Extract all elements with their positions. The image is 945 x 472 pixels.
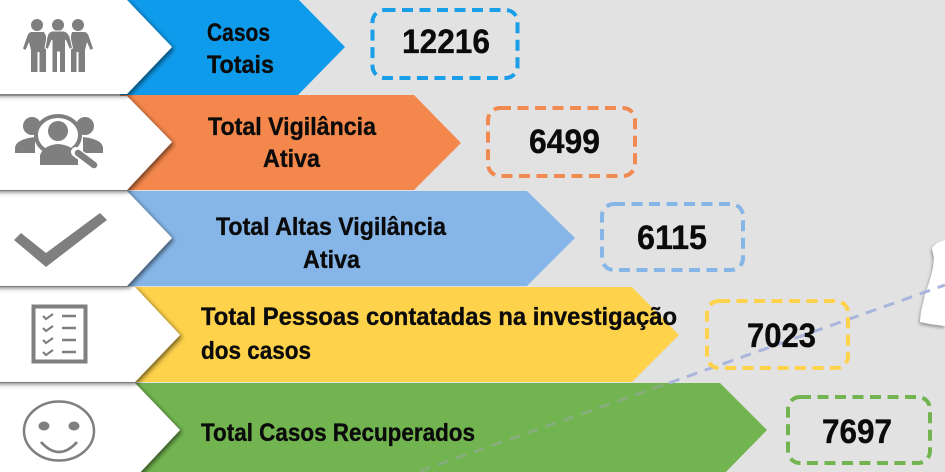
white tab: row 5 (0, 383, 180, 472)
value box: 6115: 6115 (637, 219, 707, 257)
value box: 12216: 12216 (402, 23, 490, 61)
icon: three people (23, 19, 93, 72)
white tab: row 2 (0, 96, 172, 190)
arrow: total vigilancia ativa (120, 95, 461, 190)
icon: checklist (34, 306, 86, 362)
arrow: total casos recuperados (125, 383, 767, 472)
label: total pessoas contatadas: Total Pessoas contatadas na investigação (201, 303, 677, 331)
arrow: total pessoas contatadas (125, 287, 679, 382)
arrow: casos totais (120, 0, 345, 95)
dashed connector line (420, 285, 945, 471)
map fragment (920, 240, 945, 326)
value box: 7697: 7697 (822, 413, 892, 451)
label: total pessoas contatadas: dos casos (201, 337, 311, 365)
value box: 12216 (372, 10, 518, 78)
label: total altas vigilancia ativa (216, 213, 447, 274)
value box: 7023: 7023 (747, 317, 816, 355)
icon: smiley (24, 402, 94, 460)
white tab: row 1 (0, 0, 172, 94)
label: total casos recuperados: Total Casos Recuperados (201, 419, 475, 447)
value box: 6499 (488, 108, 635, 176)
label: casos totais: Totais (207, 51, 274, 79)
label: total altas vigilancia ativa: Ativa (303, 246, 361, 274)
value box: 6115 (602, 204, 743, 270)
label: casos totais: Casos (207, 19, 270, 47)
white tab: row 4 (0, 287, 180, 382)
white tab: row 3 (0, 191, 172, 286)
icon: people with magnifier (15, 116, 103, 166)
label: total pessoas contatadas (201, 303, 677, 365)
icon: check mark (14, 213, 107, 267)
value box: 6499: 6499 (529, 123, 600, 161)
label: total altas vigilancia ativa: Total Altas Vigilância (216, 213, 447, 241)
value box: 7023 (707, 301, 848, 368)
label: casos totais (207, 19, 274, 79)
value box: 7697 (788, 397, 930, 463)
label: total vigilancia ativa: Ativa (263, 145, 321, 173)
label: total vigilancia ativa (208, 113, 377, 173)
arrow: total altas vigilancia ativa (120, 191, 575, 286)
label: total vigilancia ativa: Total Vigilância (208, 113, 377, 141)
